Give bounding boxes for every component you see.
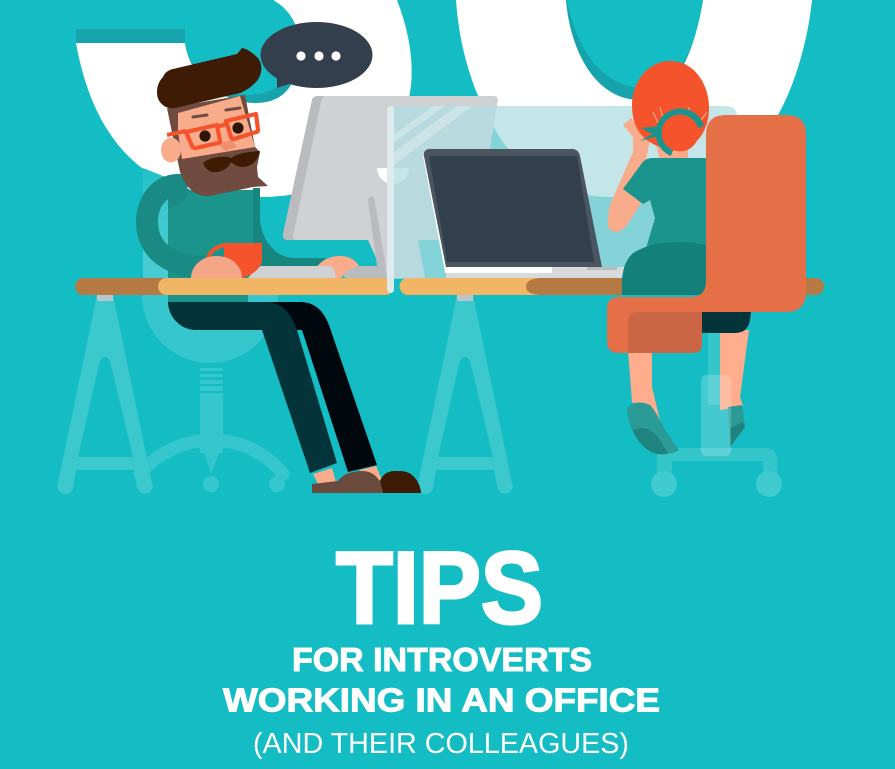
forearm and hand	[608, 118, 650, 232]
neck	[655, 140, 688, 162]
right hand	[316, 256, 359, 278]
glass reflections	[394, 106, 472, 165]
torso below the desk	[168, 295, 248, 302]
laptop lid	[424, 149, 602, 267]
title: TIPS	[336, 531, 543, 645]
hair highlights	[653, 107, 707, 123]
hair	[157, 48, 261, 108]
dark teal hips	[622, 242, 710, 295]
woman's office chair seat and back	[607, 115, 806, 353]
left hand	[191, 256, 242, 278]
translucent chair column	[701, 375, 731, 456]
ear	[161, 138, 181, 162]
mustache	[203, 151, 260, 172]
monitor stand arm	[343, 196, 387, 278]
desk tan left	[158, 278, 394, 295]
desk tan right	[400, 278, 540, 295]
left shoe shadow	[633, 428, 668, 454]
glass pane	[387, 106, 737, 279]
numeral zero: inner shadow	[566, 0, 703, 100]
hair bun	[662, 114, 698, 152]
numeral five: bar shadow	[76, 29, 185, 43]
beard and head base	[167, 95, 268, 196]
numeral five: white bowl	[76, 0, 412, 198]
laptop base	[445, 267, 552, 273]
man character	[147, 48, 421, 493]
legs	[628, 330, 749, 420]
top	[623, 158, 710, 290]
glass partition post	[387, 106, 394, 293]
computer monitor	[283, 96, 498, 278]
desk brown right	[526, 278, 824, 295]
bubble tail	[277, 75, 295, 88]
numeral zero: inner cutout	[567, 0, 703, 88]
subtitle line 2: WORKING IN AN OFFICE	[223, 682, 660, 718]
left shoe	[627, 403, 679, 454]
ankles	[313, 466, 382, 484]
chair base bar	[657, 448, 777, 484]
chair base center	[202, 445, 222, 474]
eyes	[199, 122, 244, 142]
desk brown left	[75, 278, 185, 295]
chair back and seat	[607, 115, 806, 353]
rear trouser leg	[262, 302, 377, 472]
monitor stand	[368, 240, 425, 278]
keyboard	[248, 266, 336, 278]
monitor screen back	[283, 96, 498, 240]
chair stem	[200, 368, 223, 453]
bubble body	[260, 22, 372, 88]
coffee cup	[224, 243, 262, 278]
face	[178, 96, 255, 159]
office chair base of the woman	[651, 333, 782, 497]
laptop edge highlight	[423, 156, 447, 272]
chair wheels	[136, 476, 285, 492]
numeral zero: white ring	[456, 0, 812, 197]
far arm	[253, 188, 325, 270]
laptop screen	[429, 156, 594, 262]
glasses	[167, 114, 258, 148]
torso	[168, 190, 260, 278]
front shoe	[312, 471, 383, 493]
eyebrows	[193, 108, 240, 117]
coffee cup handle	[208, 245, 226, 258]
numeral five: inner shadow	[185, 20, 297, 103]
chair stem	[708, 333, 720, 405]
speech bubble	[260, 22, 372, 88]
big white numeral shapes in background	[76, 0, 812, 198]
desk top	[75, 278, 824, 295]
desk leg left	[57, 295, 153, 494]
monitor logo	[377, 168, 409, 184]
headband	[659, 112, 701, 153]
bubble dots	[296, 51, 341, 61]
chair wheels	[651, 471, 782, 497]
headband knot	[640, 126, 662, 141]
hair	[632, 61, 709, 147]
nose	[218, 140, 237, 151]
desk leg caps	[97, 295, 473, 301]
laptop base gray	[446, 267, 627, 278]
desk leg right	[417, 295, 513, 494]
rear shoe	[379, 471, 421, 493]
glass partition	[387, 106, 737, 279]
office chair of the man	[136, 168, 285, 492]
laptop notch	[587, 267, 617, 270]
subtitle line 1: FOR INTROVERTS	[292, 641, 592, 678]
numeral five: inner cutout	[185, 0, 300, 95]
laptop	[423, 149, 627, 278]
black skirt	[682, 312, 751, 333]
chair back	[143, 168, 168, 295]
right shoe	[728, 405, 745, 447]
front trouser leg	[168, 302, 337, 473]
right shoe shadow	[730, 422, 745, 447]
near arm	[147, 185, 205, 267]
monitor left edge	[283, 96, 325, 240]
chair seat	[142, 295, 278, 363]
chair base	[140, 440, 283, 474]
subtitle line 3: (AND THEIR COLLEAGUES)	[253, 728, 629, 760]
woman character	[608, 61, 751, 454]
seat shading	[628, 312, 702, 353]
shoulder shadow	[168, 176, 190, 208]
